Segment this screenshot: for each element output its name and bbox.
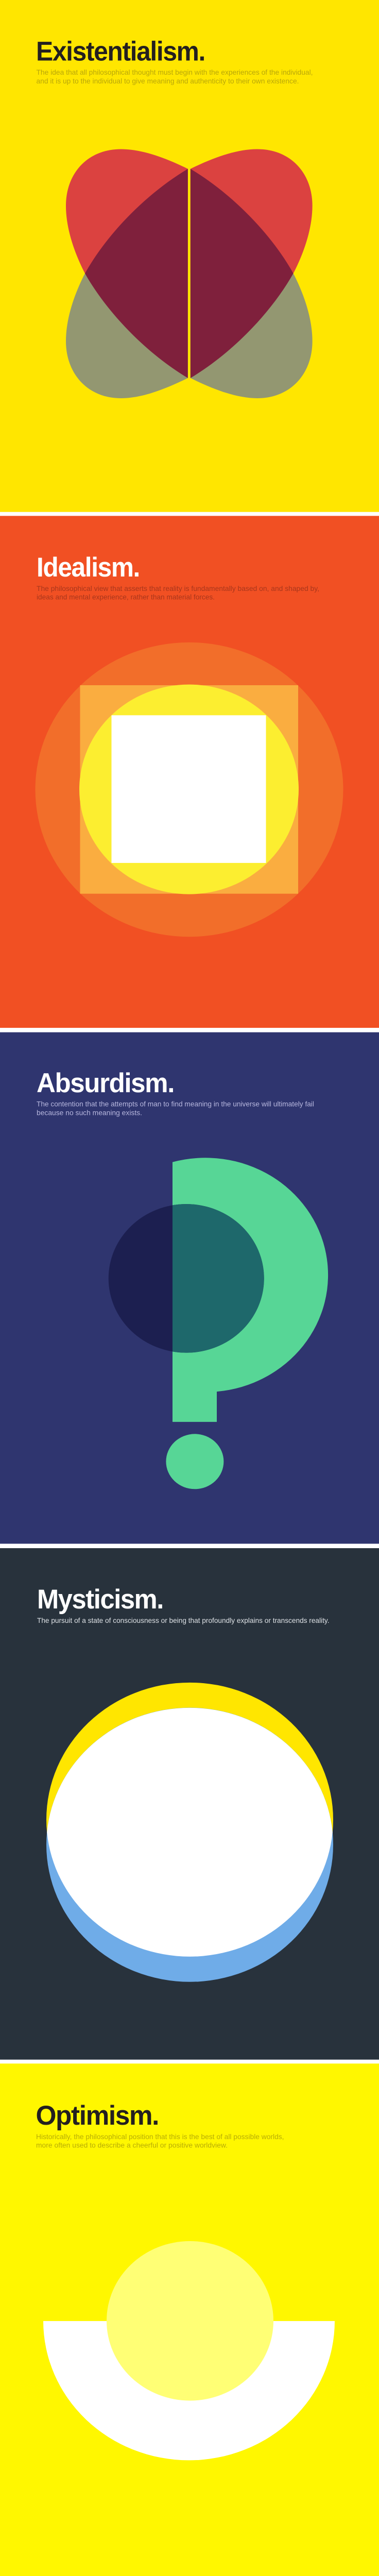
heading: Mysticism: Mysticism. [37,1584,163,1615]
icon: white half circle with pale yellow sun [43,2241,335,2460]
icon: four overlapping petals split by a vertical line [66,149,313,398]
text block: absurdism definition [37,1100,314,1117]
text block: mysticism definition: The pursuit of a state of consciousness or being that profoundly explains or transcends reality. [37,1617,330,1624]
text block: optimism definition: more often used to describe a cheerful or positive worldview. [36,2142,228,2149]
heading: Existentialism: Existentialism. [36,37,205,66]
text block: absurdism definition: The contention that the attempts of man to find meaning in the universe will ultimately fail [37,1100,314,1108]
text block: existentialism definition: and it is up to the individual to give meaning and authenticity to their own existence. [36,77,299,85]
text block: existentialism definition: The idea that all philosophical thought must begin with the experiences of the individual, [36,69,313,76]
panel: absurdism [0,1032,379,1544]
icon: question mark with dark circle [109,1158,328,1489]
text block: optimism definition: Historically, the philosophical position that this is the best of all possible worlds, [36,2133,284,2141]
heading: Idealism: Idealism. [37,552,140,583]
text block: absurdism definition: because no such meaning exists. [37,1109,142,1117]
text block: optimism definition [36,2133,284,2149]
text block: idealism definition: ideas and mental experience, rather than material forces. [37,594,215,601]
text block: idealism definition: The philosophical view that asserts that reality is fundamentally based on, and shaped by, [37,585,319,592]
icon: nested circles and squares [35,642,343,937]
panel: mysticism [0,1548,379,2060]
panel: idealism [0,516,379,1028]
icon: yellow and blue circles with white overlap [46,1683,333,1982]
heading: Optimism: Optimism. [36,2100,159,2131]
text block: existentialism definition [36,69,313,85]
heading: Absurdism: Absurdism. [37,1068,174,1098]
text block: idealism definition [37,585,319,601]
panel: existentialism [0,0,379,512]
panel: optimism [0,2063,379,2576]
